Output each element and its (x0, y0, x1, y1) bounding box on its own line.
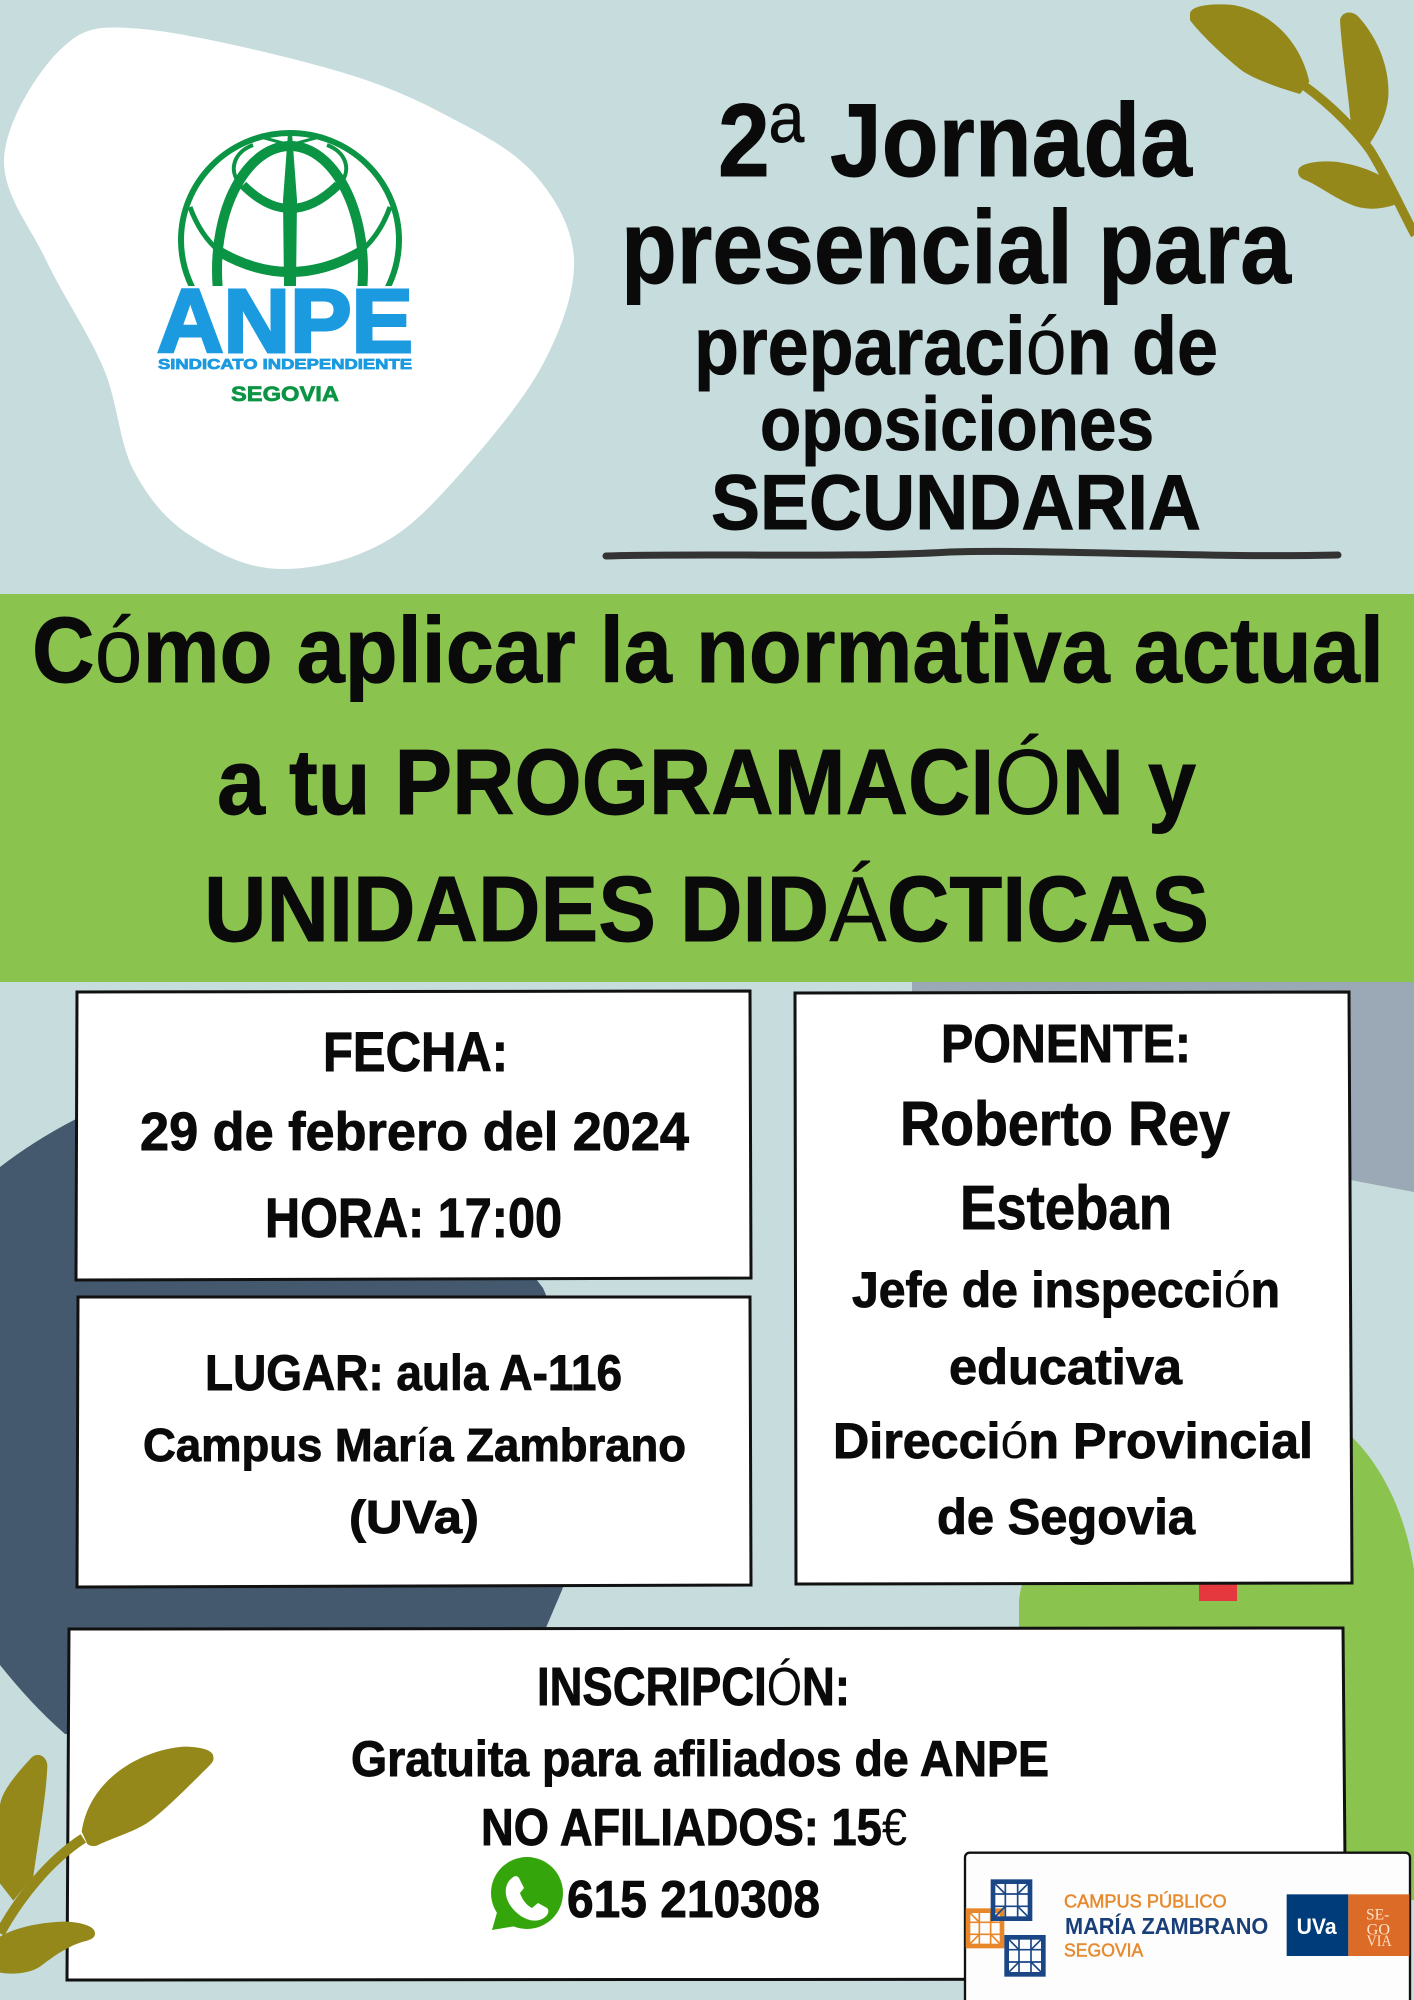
icon: whatsapp (491, 1857, 563, 1930)
ponente name 1: Roberto Rey (900, 1090, 1230, 1159)
green banner (0, 594, 1414, 982)
UVa Segovia label: GO (1367, 1921, 1390, 1938)
shape: green blob (1019, 1418, 1414, 1900)
UVa Segovia label: VIA (1367, 1933, 1392, 1950)
UVa blue square (1287, 1894, 1348, 1956)
inscripcion box (67, 1628, 1346, 1980)
lugar line 2: Campus María Zambrano (143, 1419, 686, 1471)
ponente role 1: Jefe de inspección (852, 1262, 1280, 1318)
lugar line 1: LUGAR: aula A-116 (205, 1345, 622, 1401)
banner background (0, 594, 1414, 982)
UVa label: UVa (1297, 1914, 1337, 1939)
title line 3: preparación de (694, 301, 1218, 392)
title line 5: SECUNDARIA (711, 458, 1201, 546)
ponente role 4: de Segovia (937, 1489, 1196, 1545)
logo globe (178, 130, 402, 286)
panel: inscripcion (67, 1628, 1346, 1980)
banner line 2: a tu PROGRAMACIÓN y (217, 730, 1196, 834)
UVa Segovia label (1366, 1906, 1392, 1950)
logo: ANPE Segovia (157, 133, 413, 406)
title (621, 83, 1292, 546)
panel: ponente (795, 992, 1352, 1584)
inscripcion label: INSCRIPCIÓN: (537, 1657, 850, 1717)
logo wordmark ANPE: ANPE (157, 272, 413, 372)
campus card (965, 1853, 1410, 2000)
ponente name 2: Esteban (960, 1174, 1172, 1243)
logo: Campus Maria Zambrano (965, 1853, 1410, 2000)
logo Segovia label: SEGOVIA (231, 383, 339, 406)
shape: red tab (1199, 1578, 1237, 1601)
hora: HORA: 17:00 (265, 1186, 562, 1249)
title underline (606, 551, 1338, 556)
ponente label: PONENTE: (941, 1014, 1191, 1074)
campus text line 1: CAMPUS PÚBLICO (1064, 1890, 1227, 1911)
leaves bottom left (0, 1747, 214, 1974)
lugar box (77, 1297, 751, 1587)
shape: grey corner (912, 982, 1414, 1192)
white logo blob (4, 27, 574, 569)
title line 1: 2ª Jornada (718, 83, 1193, 199)
fecha box (76, 991, 751, 1280)
campus text line 3: SEGOVIA (1064, 1940, 1144, 1961)
ponente box (795, 992, 1352, 1584)
shape: navy blob (0, 1101, 576, 1740)
title line 2: presencial para (621, 190, 1292, 306)
inscripcion line 1: Gratuita para afiliados de ANPE (351, 1731, 1049, 1787)
ponente role 3: Dirección Provincial (833, 1413, 1313, 1469)
ponente role 2: educativa (949, 1339, 1183, 1395)
UVa Segovia label: SE- (1366, 1906, 1389, 1923)
panel: fecha (76, 991, 751, 1280)
banner line 3: UNIDADES DIDÁCTICAS (204, 857, 1209, 961)
lugar line 3: (UVa) (349, 1491, 479, 1543)
fecha label: FECHA: (323, 1020, 508, 1083)
panel: lugar (77, 1297, 751, 1587)
title line 4: oposiciones (760, 382, 1154, 467)
inscripcion line 2: NO AFILIADOS: 15€ (481, 1799, 907, 1857)
UVa orange square (1348, 1894, 1409, 1956)
fecha date: 29 de febrero del 2024 (140, 1102, 689, 1162)
leaves top right (1190, 4, 1414, 235)
logo subtitle: SINDICATO INDEPENDIENTE (158, 356, 412, 373)
campus text line 2: MARÍA ZAMBRANO (1065, 1913, 1268, 1939)
campus icon (968, 1882, 1043, 1974)
phone number: 615 210308 (567, 1871, 820, 1929)
